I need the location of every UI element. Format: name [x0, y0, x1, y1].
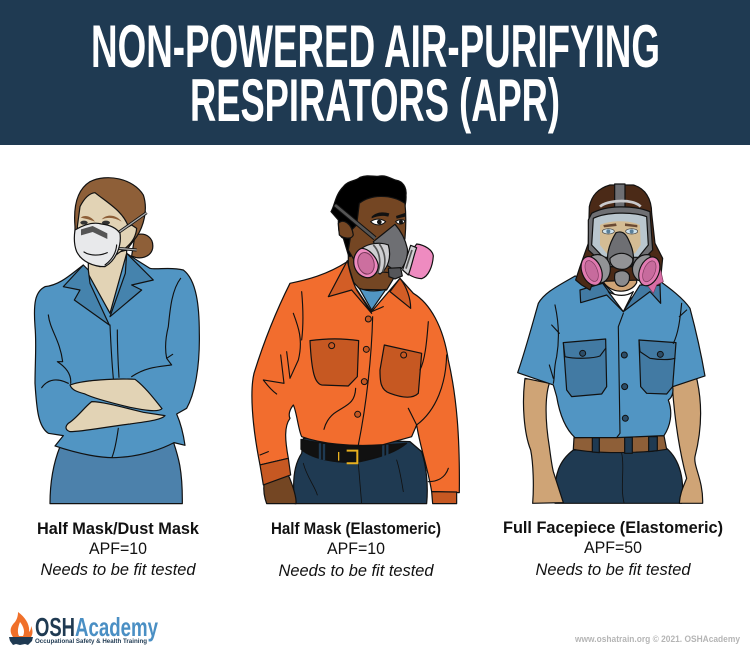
- cartridge hubs: [585, 255, 610, 283]
- buttons: [329, 316, 407, 417]
- caption: half mask / dust mask: APF=10: [89, 539, 147, 558]
- cuffs: [260, 458, 291, 485]
- hair and head: [75, 178, 145, 250]
- belt: [573, 436, 667, 453]
- undershirt: [359, 288, 386, 310]
- caption: full facepiece elastomeric: [503, 518, 723, 579]
- caption: half mask elastomeric: Half Mask (Elastomeric): [271, 519, 441, 538]
- mask straps: [118, 213, 147, 250]
- neck: [348, 253, 397, 290]
- face: [77, 193, 137, 267]
- logo: OSHAcademy: [9, 612, 158, 645]
- icon: flame on gear: [9, 612, 33, 645]
- face: [600, 221, 641, 253]
- arms: [523, 378, 563, 503]
- facepiece frame: [588, 207, 653, 267]
- shirt folds: [260, 292, 448, 482]
- shirt: [34, 253, 199, 458]
- left cartridge: [362, 243, 390, 274]
- hand: [264, 475, 296, 504]
- title text: [91, 13, 660, 134]
- lens: [592, 213, 648, 257]
- figure: worker with dust mask: [34, 178, 199, 504]
- undershirt: [608, 292, 633, 312]
- brows and eyes: [603, 223, 637, 227]
- pockets: [310, 339, 359, 386]
- head strap: [615, 184, 625, 208]
- shirt with sleeves: [252, 262, 459, 493]
- shirt folds: [549, 303, 687, 438]
- collar: [63, 265, 109, 325]
- caption: full facepiece elastomeric: Full Facepiece (Elastomeric): [503, 518, 723, 537]
- crossed arms: [70, 379, 162, 411]
- neck: [88, 250, 127, 313]
- right cartridge: [403, 244, 433, 279]
- face: [348, 196, 406, 273]
- neck: [603, 277, 637, 291]
- trousers: [555, 448, 683, 503]
- pink fringe: [642, 270, 663, 293]
- half mask: [354, 224, 433, 279]
- hair: [576, 185, 663, 290]
- belt: [301, 439, 407, 462]
- pockets: [563, 339, 607, 397]
- left filter: [577, 253, 606, 289]
- figure: worker with elastomeric half mask: [252, 176, 459, 504]
- brows and eyes: [372, 212, 406, 219]
- right filter: [635, 254, 664, 289]
- nose piece: [373, 224, 407, 272]
- collar: [580, 283, 623, 312]
- collar: [328, 261, 372, 313]
- eyes and brows: [81, 216, 122, 222]
- shirt folds: [42, 278, 181, 457]
- skirt: [50, 442, 182, 504]
- caption: full facepiece elastomeric: APF=50: [584, 538, 642, 557]
- tagline: Occupational Safety & Health Training: [35, 638, 147, 645]
- hair bun: [132, 234, 153, 258]
- trousers: [294, 438, 427, 504]
- title banner: [0, 0, 750, 145]
- logo: OSHAcademy: Academy: [75, 612, 158, 642]
- figure: worker with full facepiece: [518, 184, 705, 503]
- caption: half mask elastomeric: Needs to be fit tested: [278, 561, 434, 580]
- buttons: [580, 350, 663, 421]
- hair: [331, 176, 406, 257]
- caption: full facepiece elastomeric: Needs to be fit tested: [536, 560, 691, 579]
- shirt: [518, 276, 705, 438]
- caption: half mask / dust mask: [37, 519, 200, 579]
- caption: half mask elastomeric: [271, 519, 441, 580]
- caption: half mask elastomeric: APF=10: [327, 539, 385, 558]
- dust mask: [74, 223, 120, 267]
- wordmark: OSH: [35, 612, 75, 642]
- belt buckle: [347, 451, 357, 463]
- exhalation valve: [610, 253, 633, 269]
- caption: half mask / dust mask: Needs to be fit tested: [40, 560, 196, 579]
- ear: [338, 221, 353, 238]
- inner nose cup: [608, 232, 633, 267]
- head strap: [335, 205, 375, 238]
- caption: half mask / dust mask: Half Mask/Dust Mask: [37, 519, 200, 538]
